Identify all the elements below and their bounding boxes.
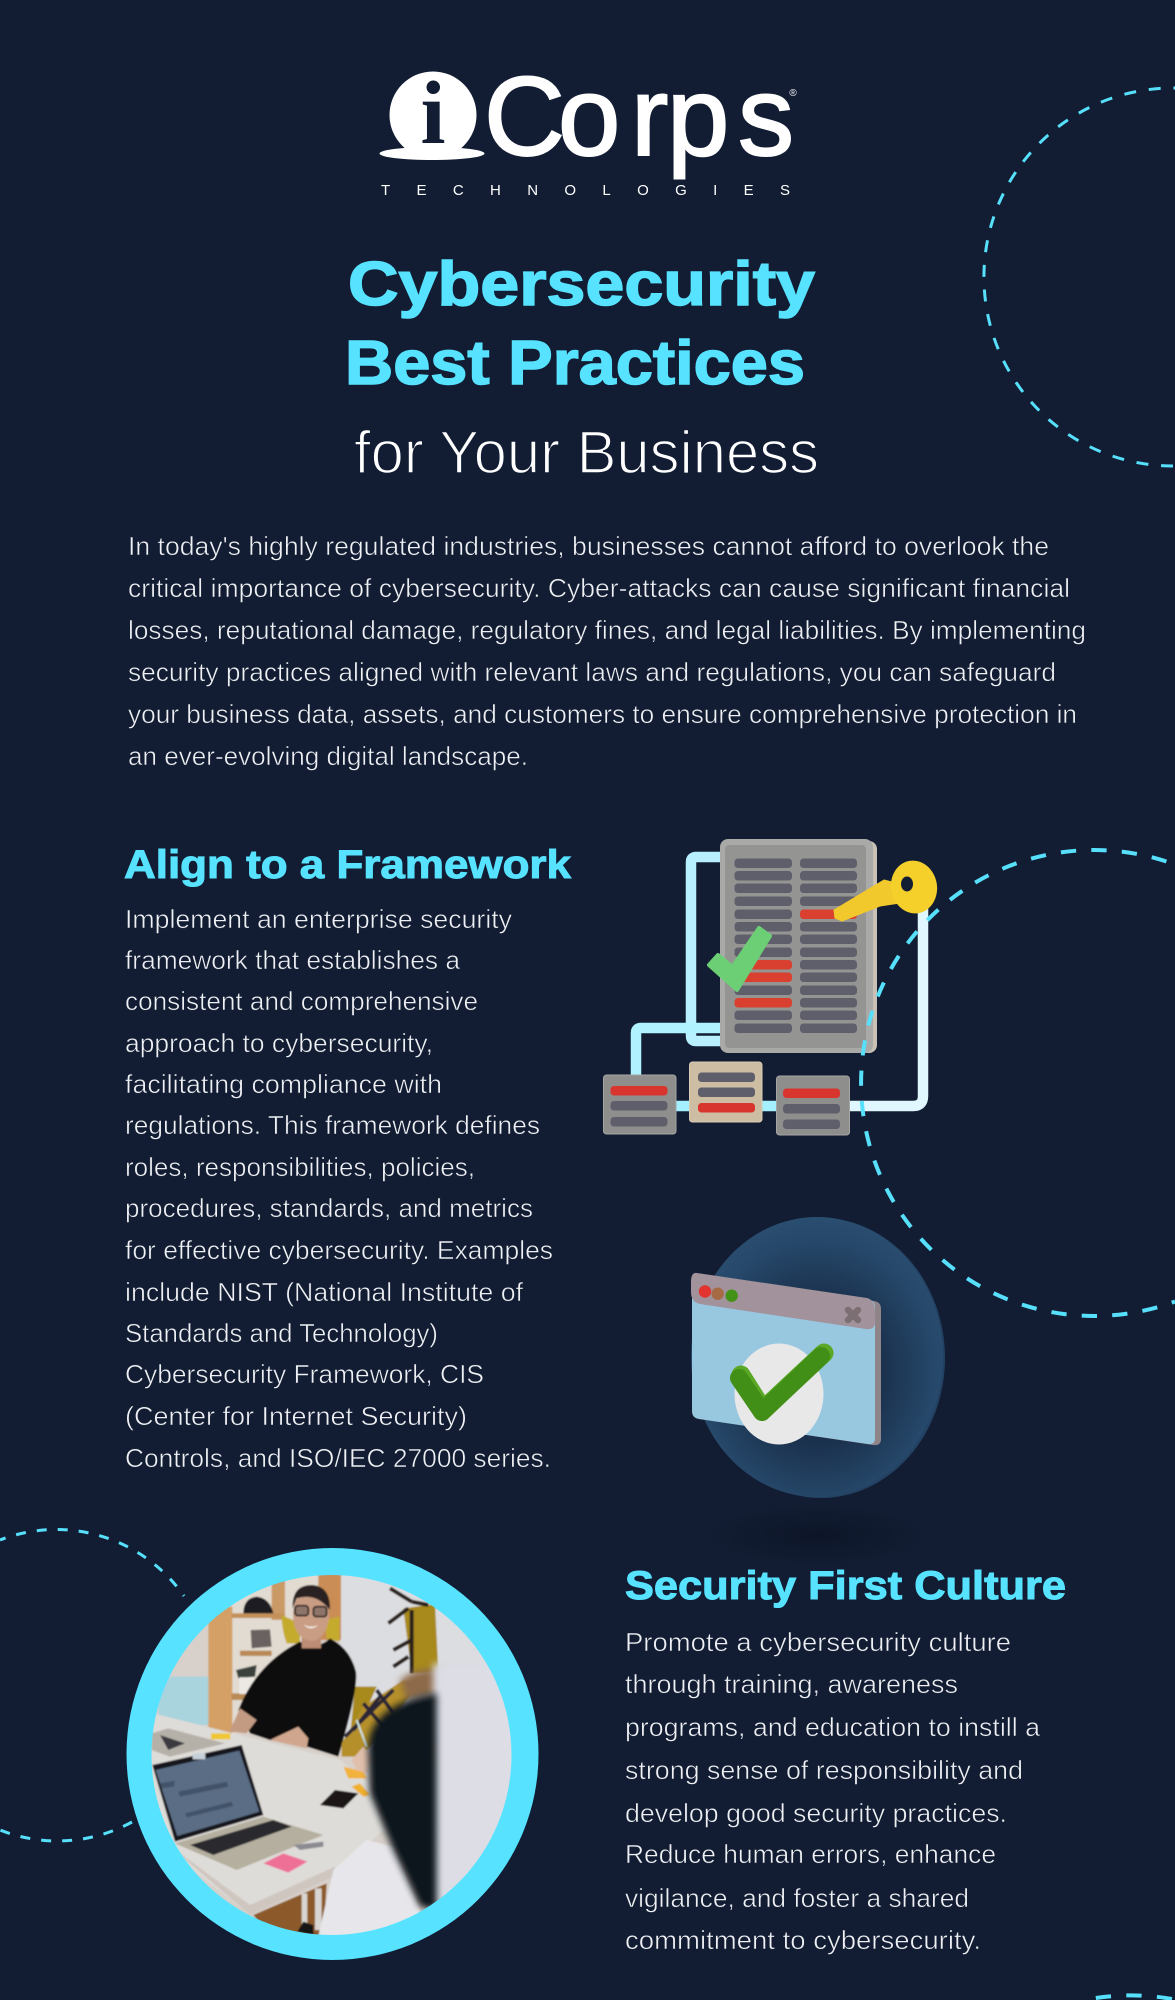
- text: framework description: regulations. This framework defines: [125, 1110, 540, 1140]
- dashed circle: middle right: [861, 850, 1175, 1316]
- white circle: [734, 1344, 824, 1444]
- dashed circle: bottom right: [1090, 1995, 1172, 1999]
- text: framework description: [125, 904, 553, 1473]
- registered mark: ®: [789, 88, 797, 99]
- intro paragraph: losses, reputational damage, regulatory fines, and legal liabilities. By implementing: [128, 615, 1086, 645]
- text: culture description: Reduce human errors, enhance: [625, 1839, 996, 1869]
- text: culture description: vigilance, and foster a shared: [625, 1883, 969, 1913]
- network box: left: [604, 1075, 676, 1134]
- title: Cybersecurity: [348, 250, 816, 319]
- text: framework description: consistent and comprehensive: [125, 986, 478, 1016]
- title: Best Practices: [345, 329, 805, 398]
- heading: Align to a Framework: Align to a Framework: [124, 843, 572, 887]
- intro paragraph: an ever-evolving digital landscape.: [128, 741, 528, 771]
- network box: middle: [690, 1062, 762, 1122]
- logo tagline: TECHNOLOGIES: [381, 182, 790, 199]
- intro paragraph: your business data, assets, and customers to ensure comprehensive protection in: [128, 699, 1077, 729]
- dashed circle: top right: [984, 88, 1175, 466]
- intro paragraph: critical importance of cybersecurity. Cyber-attacks can cause significant financial: [128, 573, 1070, 603]
- text: framework description: roles, responsibilities, policies,: [125, 1152, 475, 1182]
- icon shadow: [702, 1503, 932, 1567]
- text: framework description: include NIST (National Institute of: [125, 1277, 524, 1307]
- intro paragraph: security practices aligned with relevant laws and regulations, you can safeguard: [128, 657, 1056, 687]
- disc: [691, 1217, 945, 1498]
- text: culture description: Promote a cybersecurity culture: [625, 1627, 1011, 1657]
- logo wordmark: Corps: [484, 54, 794, 179]
- text: culture description: commitment to cybersecurity.: [625, 1925, 981, 1955]
- text: framework description: Cybersecurity Framework, CIS: [125, 1359, 484, 1389]
- text: framework description: facilitating compliance with: [125, 1069, 442, 1099]
- logo icon: i in circle with hat brim: [380, 72, 484, 160]
- dashed circle: lower left: [0, 1530, 184, 1841]
- text: culture description: develop good security practices.: [625, 1798, 1007, 1828]
- photo: [143, 1570, 520, 1943]
- text: framework description: framework that establishes a: [125, 945, 461, 975]
- text: culture description: strong sense of responsibility and: [625, 1755, 1023, 1785]
- yellow key: [834, 857, 941, 921]
- text: framework description: for effective cybersecurity. Examples: [125, 1235, 553, 1265]
- network pipes: [636, 857, 923, 1106]
- photo ring: [126, 1548, 538, 1960]
- text: culture description: through training, awareness: [625, 1669, 958, 1699]
- intro paragraph: In today's highly regulated industries, businesses cannot afford to overlook the: [128, 531, 1049, 561]
- text: framework description: Implement an enterprise security: [125, 904, 512, 934]
- network box: right: [776, 1076, 850, 1135]
- title: for Your Business: [354, 419, 819, 486]
- text: framework description: Controls, and ISO/IEC 27000 series.: [125, 1443, 551, 1473]
- text: framework description: (Center for Internet Security): [125, 1401, 467, 1431]
- browser window: [691, 1273, 881, 1445]
- text: culture description: [625, 1627, 1041, 1955]
- logo: iCorps Technologies: [380, 72, 797, 195]
- photo: team meeting in ring: [126, 1548, 538, 1960]
- heading: Security First Culture: Security First Culture: [625, 1564, 1066, 1608]
- server cabinet: [720, 839, 877, 1053]
- text: culture description: programs, and education to instill a: [625, 1712, 1041, 1742]
- green check: [739, 1353, 824, 1412]
- icon: server with key and check: [604, 839, 941, 1135]
- icon: browser window with check on disc: [691, 1217, 945, 1567]
- logo icon: i in circle with hat brim: i: [420, 64, 446, 163]
- intro paragraph: [128, 531, 1086, 771]
- title: [345, 250, 819, 486]
- text: framework description: approach to cybersecurity,: [125, 1028, 433, 1058]
- text: framework description: procedures, standards, and metrics: [125, 1193, 533, 1223]
- green check mark: [709, 928, 770, 990]
- text: framework description: Standards and Technology): [125, 1318, 438, 1348]
